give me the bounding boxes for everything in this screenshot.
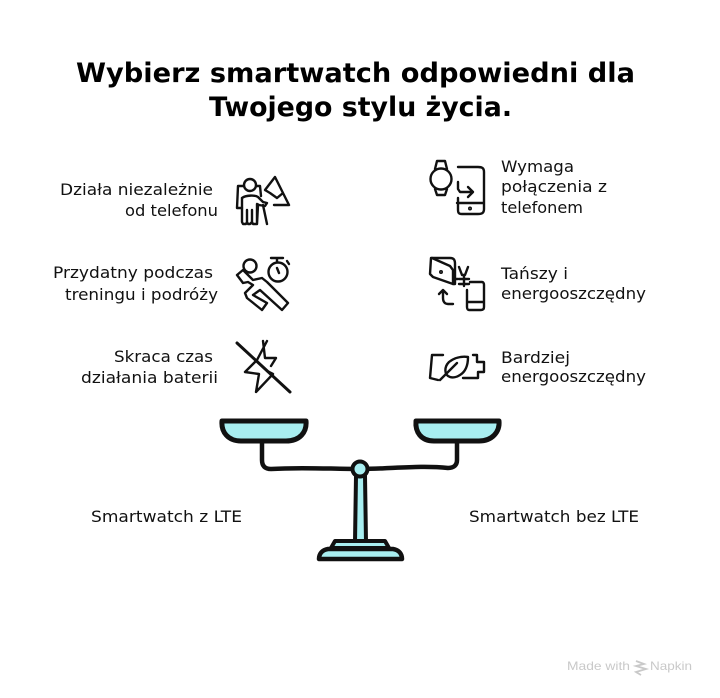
text: useful during training and travel: Przydatny podczas	[53, 263, 213, 282]
icon: crossed out lightning	[237, 341, 290, 392]
base	[331, 541, 389, 548]
icon: hiker and mountain	[237, 177, 289, 224]
icon: watch and phone	[430, 161, 484, 214]
label: smartwatch without LTE: Smartwatch bez LTE	[469, 507, 639, 526]
text: shortens battery life: działania baterii	[81, 368, 218, 387]
text: more energy efficient: energooszczędny	[501, 367, 646, 386]
text: useful during training and travel	[53, 263, 218, 304]
left pan	[222, 421, 306, 441]
text: requires connection to phone: telefonem	[501, 198, 583, 217]
beam and stems	[262, 443, 457, 469]
text: shortens battery life: Skraca czas	[114, 347, 213, 366]
text: more energy efficient: Bardziej	[501, 348, 570, 367]
footer: made with Napkin	[567, 659, 692, 675]
post	[355, 476, 366, 542]
text: shortens battery life	[81, 347, 218, 387]
text: useful during training and travel: treningu i podróży	[65, 285, 218, 304]
label: smartwatch with LTE: Smartwatch z LTE	[91, 507, 242, 526]
text: requires connection to phone: połączenia z	[501, 177, 607, 196]
text: more energy efficient	[501, 348, 646, 386]
pivot	[352, 462, 368, 476]
title	[76, 58, 635, 123]
text: works independently of phone	[60, 180, 218, 220]
text: works independently of phone: Działa niezależnie	[60, 180, 213, 199]
scale illustration	[222, 421, 499, 559]
icon: cheaper wallet, yen and phone	[430, 258, 484, 310]
text: cheaper and energy efficient	[500, 264, 646, 303]
text: requires connection to phone	[501, 157, 607, 217]
text: works independently of phone: od telefonu	[125, 201, 218, 220]
title: Wybierz smartwatch odpowiedni dla	[76, 58, 635, 89]
text: cheaper and energy efficient: Tańszy i	[500, 264, 568, 283]
icon: runner and stopwatch	[237, 258, 289, 310]
title: Twojego stylu życia.	[209, 92, 512, 123]
icon: battery with leaf	[430, 355, 484, 380]
right pan	[416, 421, 499, 441]
footer: made with Napkin: Made with	[567, 659, 630, 673]
footer: made with Napkin: Napkin	[650, 659, 692, 673]
text: requires connection to phone: Wymaga	[501, 157, 574, 176]
text: cheaper and energy efficient: energooszczędny	[501, 284, 646, 303]
